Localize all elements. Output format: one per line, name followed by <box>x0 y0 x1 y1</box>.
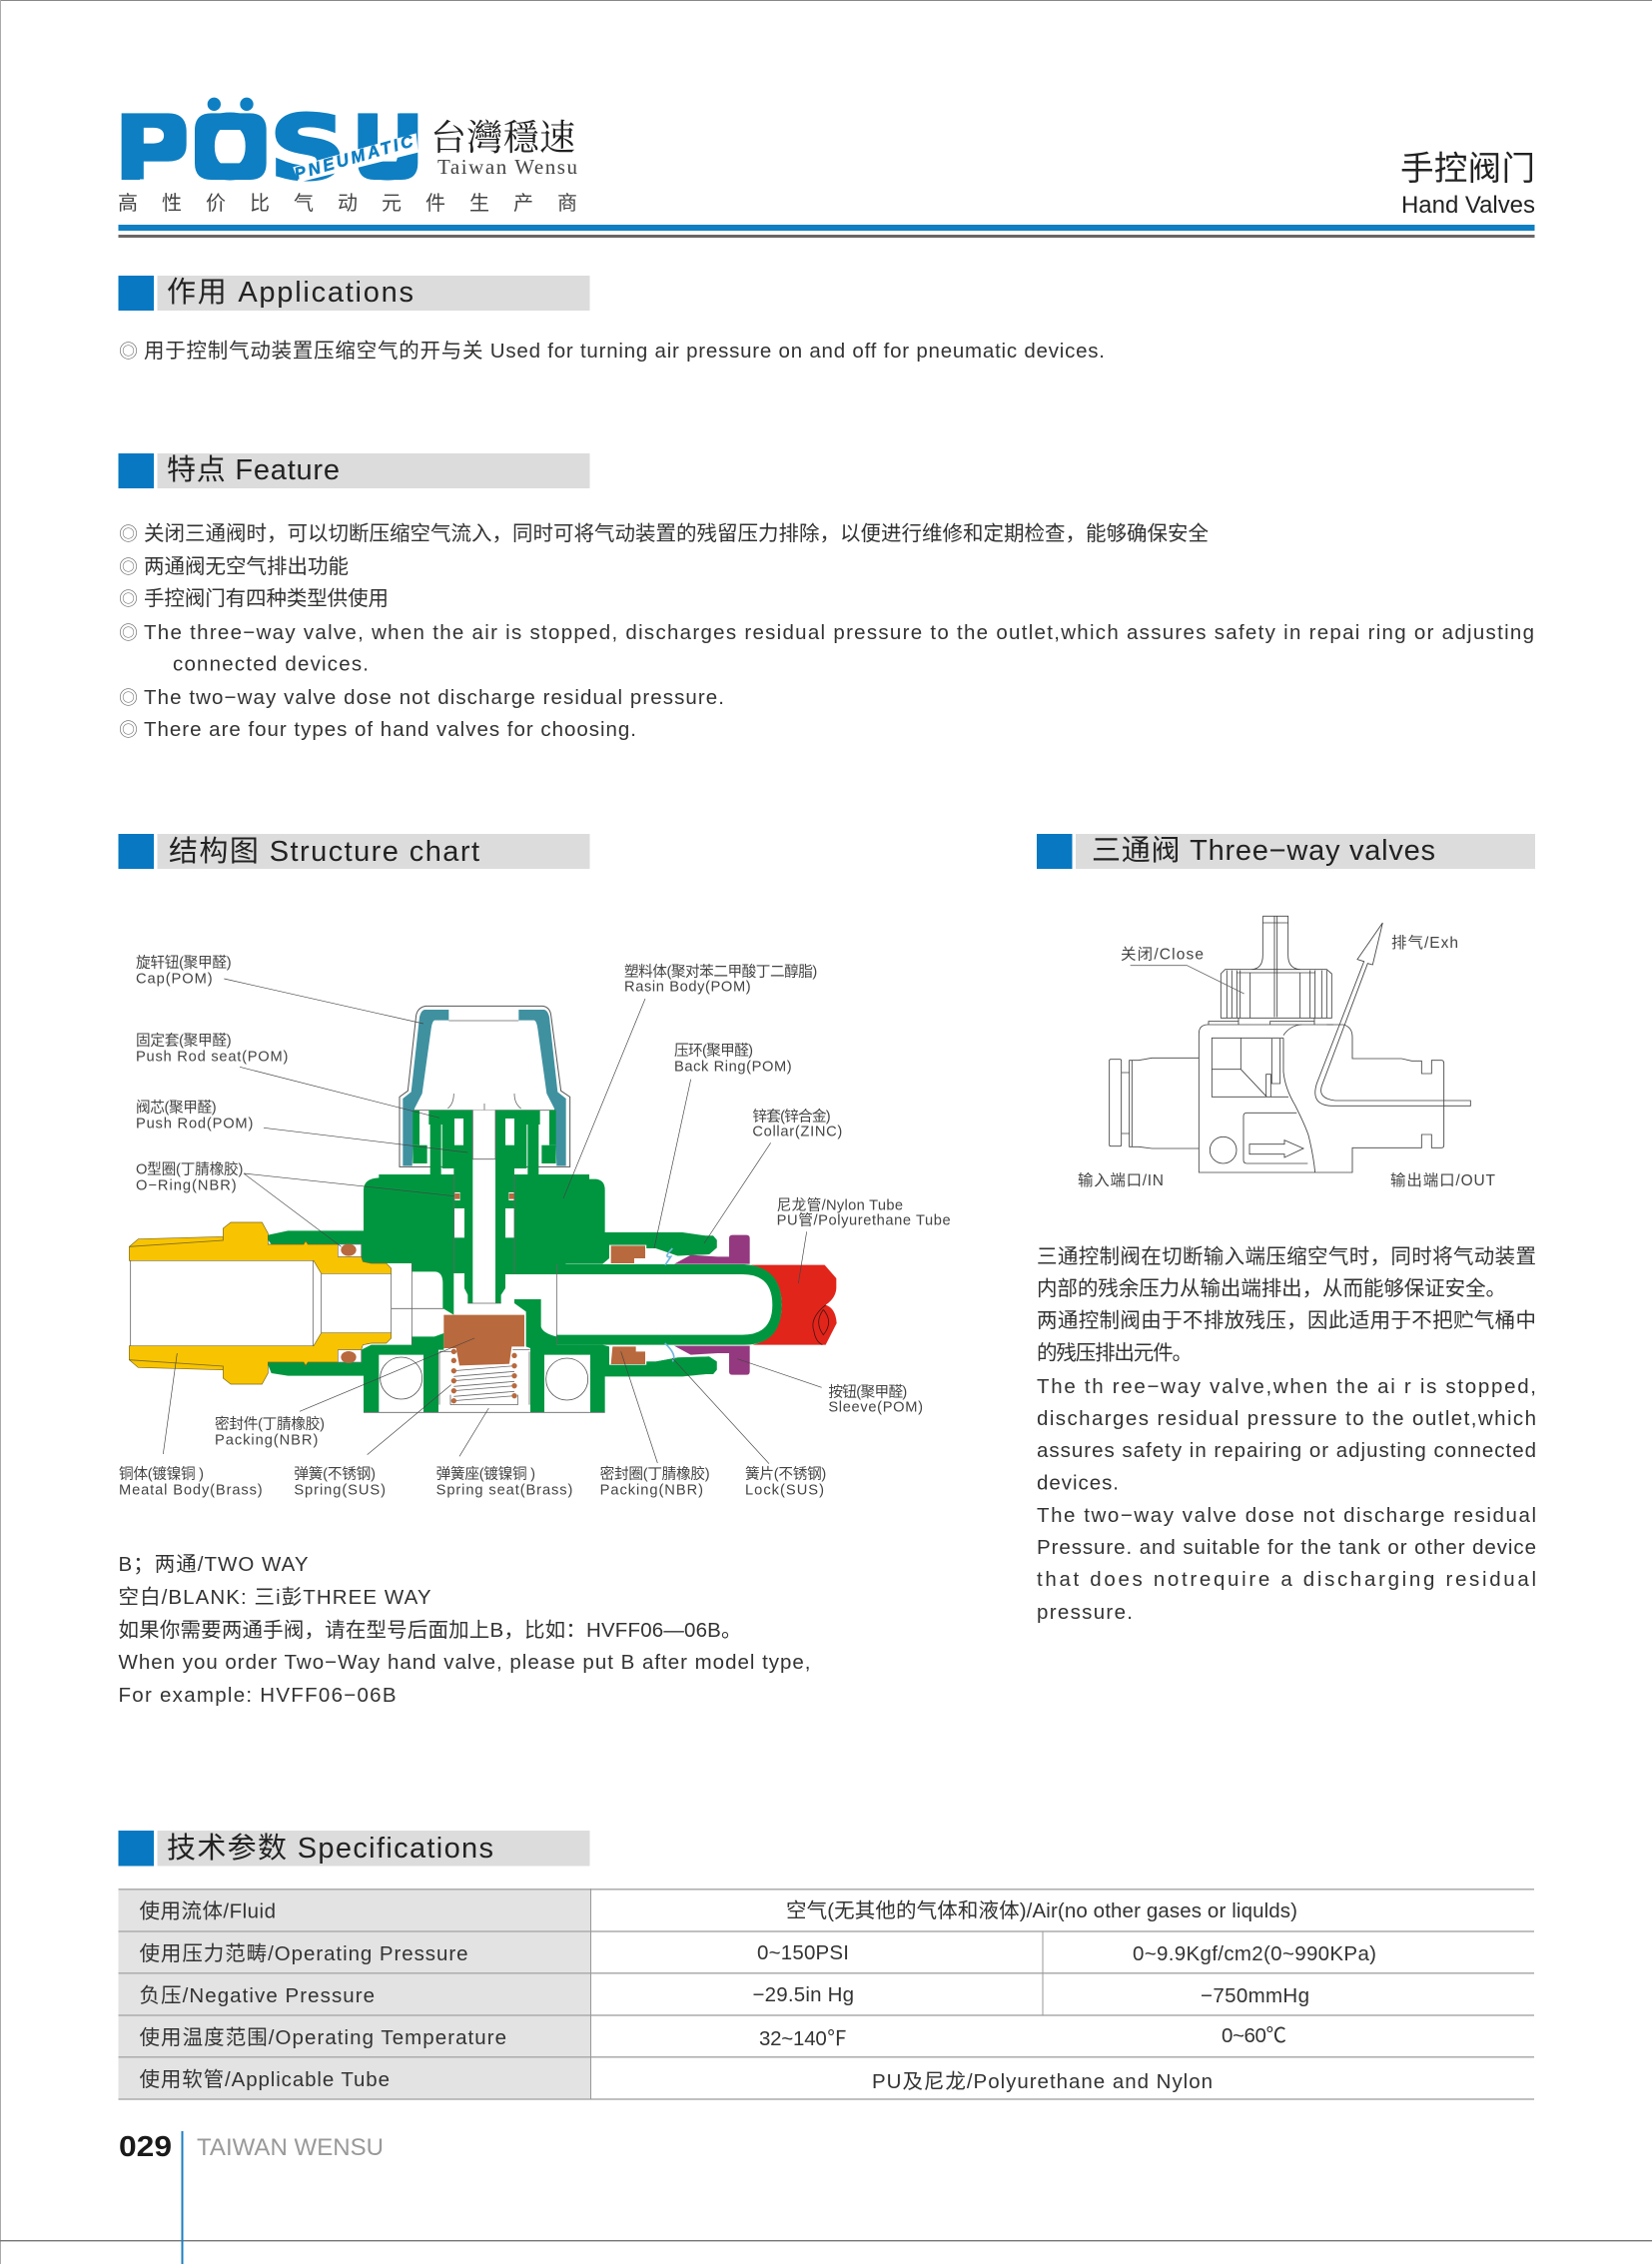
text: three-way description: 三通控制阀在切断输入端压缩空气时，同时将气动装置 <box>1037 1245 1536 1268</box>
callout: Spring <box>294 1466 386 1499</box>
callout: Push Rod seat <box>136 1033 288 1066</box>
text: applications: 用于控制气动装置压缩空气的开与关 Used for turning air pressure on and off for pneumatic devices. <box>144 340 1105 363</box>
callout: Push Rod: 阀芯(聚甲醛) <box>136 1099 217 1116</box>
callout: Push Rod seat: 固定套(聚甲醛) <box>136 1033 232 1050</box>
row: operating temperature: 0~60℃ <box>1222 2024 1286 2047</box>
row: operating pressure: 使用压力范畴/Operating Pressure <box>140 1942 467 1965</box>
header rule <box>118 225 1534 238</box>
heading: Feature <box>118 453 589 488</box>
callout: Push Rod: Push Rod(POM) <box>136 1116 253 1132</box>
heading: Feature: 特点 Feature <box>167 453 340 486</box>
logo: POSU Pneumatic Taiwan Wensu <box>114 98 577 215</box>
logo slogan: 高性价比气动元件生产商 <box>118 192 577 215</box>
text: feature list: ◎ <box>119 588 138 610</box>
text: feature list: connected devices. <box>173 653 369 675</box>
row: operating pressure: 0~9.9Kgf/cm2(0~990KPa) <box>1133 1942 1376 1965</box>
row: negative pressure: 负压/Negative Pressure <box>140 1984 375 2007</box>
callout: Lock: 簧片(不锈钢) <box>745 1466 826 1483</box>
steel lock springs <box>665 1248 674 1361</box>
callout: Back Ring: Back Ring(POM) <box>674 1060 792 1076</box>
callout: O-Ring <box>136 1161 243 1194</box>
logo English name: Taiwan Wensu <box>437 155 577 179</box>
text: three-way description: assures safety in repairing or adjusting connected <box>1037 1439 1536 1462</box>
O-rings <box>338 1193 514 1363</box>
heading: Applications <box>118 276 589 311</box>
logo wordmark: O <box>192 98 269 200</box>
callout: Cap <box>136 954 232 987</box>
row: fluid: 使用流体/Fluid <box>140 1899 276 1923</box>
callout: O-Ring: O−Ring(NBR) <box>136 1178 237 1194</box>
callout: Lock: Lock(SUS) <box>745 1483 824 1499</box>
logo wordmark: P <box>114 98 190 200</box>
callout: Collar: Collar(ZINC) <box>752 1125 842 1140</box>
heading: Structure chart <box>118 834 589 869</box>
callout: Tube: PU管/Polyurethane Tube <box>777 1212 951 1229</box>
purple sleeve <box>674 1235 750 1375</box>
leader: close <box>1131 966 1244 994</box>
callout: Spring seat <box>436 1466 572 1499</box>
label: Output port: 输出端口/OUT <box>1390 1171 1496 1189</box>
heading: Applications: 作用 Applications <box>167 276 413 309</box>
label: Close: 关闭/Close <box>1121 945 1204 963</box>
three-way valve line drawing <box>1110 916 1470 1172</box>
logo wordmark <box>114 98 423 200</box>
text: feature list: There are four types of hand valves for choosing. <box>144 718 636 741</box>
callout: Packing right: 密封圈(丁腈橡胶) <box>600 1466 710 1483</box>
specifications table <box>118 1888 1534 2100</box>
callout: Sleeve <box>828 1383 923 1415</box>
callout: Metal Body: Meatal Body(Brass) <box>119 1483 263 1499</box>
callout: Metal Body: 铜体(镀镍铜 ) <box>119 1466 204 1483</box>
arrow: exhaust path <box>1315 923 1470 1106</box>
leader lines <box>163 979 822 1464</box>
callout: Back Ring: 压环(聚甲醛) <box>674 1043 753 1060</box>
heading: Three-way valves <box>1037 834 1535 869</box>
table grid <box>118 1888 1534 2100</box>
callout: Packing right: Packing(NBR) <box>600 1483 703 1499</box>
row: negative pressure: −29.5in Hg <box>753 1983 854 2006</box>
structure chart: valve cross-section <box>119 954 951 1499</box>
callout: Cap: Cap(POM) <box>136 971 213 987</box>
row: operating pressure: 0~150PSI <box>757 1941 849 1964</box>
screw holes <box>381 1357 588 1400</box>
callout: Back Ring <box>674 1043 792 1076</box>
footer <box>119 2131 384 2264</box>
callout: Tube <box>777 1197 951 1229</box>
tube end detail <box>813 1305 829 1345</box>
text: feature list: ◎ <box>119 556 138 578</box>
row: operating temperature: 32~140℉ <box>759 2027 847 2050</box>
text: ordering note: 空白/BLANK: 三i彭THREE WAY <box>118 1586 431 1609</box>
footer divider <box>182 2131 184 2264</box>
text: feature list: The three−way valve, when the air is stopped, discharges residual pressure to the outlet,which assures safety in repai ring or adjusting <box>144 621 1534 644</box>
row: fluid: 空气(无其他的气体和液体)/Air(no other gases or liqulds) <box>786 1899 1297 1922</box>
callout: Spring: 弹簧(不锈钢) <box>294 1466 376 1483</box>
row: applicable tube: PU及尼龙/Polyurethane and Nylon <box>872 2070 1213 2093</box>
row: applicable tube <box>140 2068 1213 2093</box>
text: feature list: ◎ <box>119 719 138 741</box>
heading: Specifications <box>118 1831 589 1866</box>
text: three-way description: 的残压排出元件。 <box>1037 1342 1193 1364</box>
callout: Collar <box>752 1109 842 1140</box>
text: feature list <box>119 522 1534 741</box>
text: three-way description <box>1037 1245 1536 1624</box>
page title: Hand Valves <box>1401 192 1535 219</box>
callout: Packing right <box>600 1466 710 1499</box>
logo Chinese name: 台灣穩速 <box>430 118 575 158</box>
logo wordmark: PNEUMATIC <box>293 132 415 184</box>
text: feature list: 两通阀无空气排出功能 <box>144 555 349 578</box>
label: Input port: 输入端口/IN <box>1078 1171 1164 1189</box>
callout: Rasin Body: 塑料体(聚对苯二甲酸丁二醇脂) <box>624 964 817 981</box>
callout: Push Rod <box>136 1099 253 1132</box>
logo wordmark: S <box>270 98 346 200</box>
row: operating pressure <box>140 1941 1376 1965</box>
text: three-way description: pressure. <box>1037 1601 1133 1624</box>
text: three-way description: 内部的残余压力从输出端排出，从而能够保证安全。 <box>1037 1277 1506 1300</box>
green inner tube <box>556 1264 782 1345</box>
text: three-way description: 两通控制阀由于不排放残压，因此适用于不把贮气桶中 <box>1037 1309 1536 1332</box>
callout: Packing left: 密封件(丁腈橡胶) <box>215 1416 325 1433</box>
row: negative pressure: −750mmHg <box>1201 1984 1309 2007</box>
text: ordering note: 如果你需要两通手阀，请在型号后面加上B，比如：HVFF06—06B。 <box>118 1619 741 1642</box>
callout: Metal Body <box>119 1466 263 1499</box>
white passages <box>454 1111 514 1303</box>
callout: Cap: 旋轩钮(聚甲醛) <box>136 954 232 971</box>
callout: Sleeve: Sleeve(POM) <box>828 1399 923 1415</box>
callout: O-Ring: O型圈(丁腈橡胶) <box>136 1161 243 1178</box>
page title: 手控阀门 <box>1400 151 1535 188</box>
callout: Rasin Body <box>624 964 817 996</box>
row: applicable tube: 使用软管/Applicable Tube <box>140 2068 390 2091</box>
text: three-way description: Pressure. and suitable for the tank or other device <box>1037 1536 1536 1559</box>
row: fluid <box>140 1899 1297 1923</box>
collar noses <box>646 1235 717 1375</box>
row: negative pressure <box>140 1983 1309 2007</box>
text: feature list: ◎ <box>119 687 138 709</box>
knob cap <box>400 1006 570 1166</box>
text: feature list: The two−way valve dose not discharge residual pressure. <box>144 686 724 709</box>
row: operating temperature <box>140 2024 1286 2050</box>
text: three-way description: that does notrequire a discharging residual <box>1037 1568 1536 1591</box>
text: three-way description: The th ree−way valve,when the ai r is stopped, <box>1037 1375 1536 1398</box>
text: three-way description: The two−way valve dose not discharge residual <box>1037 1504 1536 1527</box>
heading: Structure chart: 结构图 Structure chart <box>169 835 479 868</box>
callout: Tube: 尼龙管/Nylon Tube <box>777 1197 903 1214</box>
brown packing rings <box>611 1245 645 1364</box>
text: ordering note: For example: HVFF06−06B <box>118 1684 396 1707</box>
text: three-way description: discharges residual pressure to the outlet,which <box>1037 1407 1536 1430</box>
text: three-way description: devices. <box>1037 1472 1119 1494</box>
text: applications: ◎ <box>119 341 138 363</box>
stem outlines <box>392 1111 514 1345</box>
green body <box>268 1111 717 1412</box>
callout: Push Rod seat: Push Rod seat(POM) <box>136 1050 288 1066</box>
footer brand: TAIWAN WENSU <box>197 2134 384 2161</box>
logo wordmark: U <box>353 98 423 200</box>
callout: Sleeve: 按钮(聚甲醛) <box>828 1383 907 1400</box>
callout: Rasin Body: Rasin Body(POM) <box>624 980 751 996</box>
page title <box>1400 151 1535 219</box>
label: Exhaust: 排气/Exh <box>1391 934 1458 952</box>
page number: 029 <box>119 2131 172 2163</box>
brass body <box>129 1222 392 1384</box>
text: feature list: ◎ <box>119 622 138 644</box>
heading: Three-way valves: 三通阀 Three−way valves <box>1092 834 1435 867</box>
red tube <box>751 1265 837 1345</box>
heading: Specifications: 技术参数 Specifications <box>167 1832 493 1865</box>
spring chamber <box>364 1349 605 1412</box>
row: operating temperature: 使用温度范围/Operating Temperature <box>140 2026 506 2049</box>
callout: Spring seat: Spring seat(Brass) <box>436 1483 572 1499</box>
brown plug packing <box>443 1315 524 1365</box>
text: feature list: ◎ <box>119 523 138 545</box>
callout: Spring seat: 弹簧座(镀镍铜 ) <box>436 1466 535 1483</box>
callout: Packing left: Packing(NBR) <box>215 1433 318 1449</box>
text: feature list: 关闭三通阀时，可以切断压缩空气流入，同时可将气动装置的残留压力排除，以便进行维修和定期检查，能够确保安全 <box>144 522 1209 545</box>
callout: Collar: 锌套(锌合金) <box>752 1109 831 1126</box>
text: ordering note <box>118 1553 811 1707</box>
text: ordering note: When you order Two−Way hand valve, please put B after model type, <box>118 1651 811 1674</box>
callout: Lock <box>745 1466 826 1499</box>
text: feature list: 手控阀门有四种类型供使用 <box>144 587 389 610</box>
valve outline <box>1110 916 1444 1172</box>
callout: Spring: Spring(SUS) <box>294 1483 386 1499</box>
callout: Packing left <box>215 1416 325 1449</box>
text: ordering note: B；两通/TWO WAY <box>118 1553 309 1576</box>
